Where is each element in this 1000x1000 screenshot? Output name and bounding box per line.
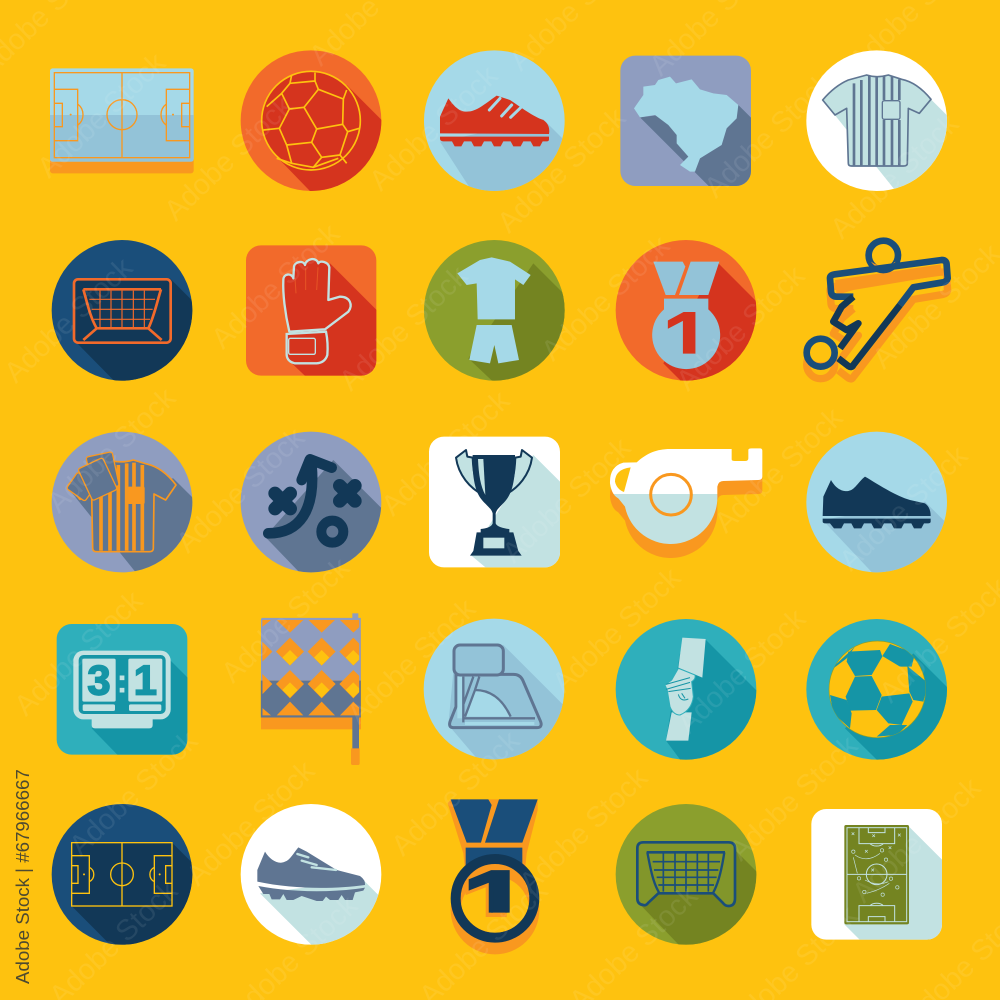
icon: navy medal with number 1 [448,799,539,954]
watermark pattern: Adobe Stock [833,440,974,577]
icon: goal on navy circle [52,240,192,381]
icon: football kit [424,240,565,381]
icon: red football boot [424,50,565,191]
icon: handball on orange circle [240,50,382,191]
watermark pattern: Adobe Stock [708,402,849,539]
icon: scoreboard 3:1: 1 [134,657,157,704]
watermark pattern: Adobe Stock [363,60,504,197]
watermark pattern: Adobe Stock [671,603,812,740]
icon: navy boot on blue circle [806,432,947,572]
icon: soccer ball on teal circle [806,619,947,760]
watermark pattern: Adobe Stock [215,552,356,689]
stock id caption: Adobe Stock | #67966667 [12,769,33,984]
icon: tactics board [240,432,382,572]
watermark pattern: Adobe Stock [158,90,299,227]
icon: map of Brazil [620,56,751,186]
watermark pattern: Adobe Stock [205,218,346,355]
watermark pattern: Adobe Stock [41,382,182,519]
watermark pattern: Adobe Stock [496,432,637,569]
icon: whistle [610,448,762,558]
icon: hand holding card [616,619,756,760]
icon: goal on olive circle [616,804,756,945]
icon: scoreboard 3:1: 3 [87,657,111,704]
watermark pattern: Adobe Stock [670,260,811,397]
watermark pattern: Adobe Stock [31,47,172,184]
icon: football pitch [50,68,194,173]
icon: navy medal with number 1: 1 [460,860,527,945]
watermark pattern: Adobe Stock [385,725,526,862]
icon: scoreboard 3:1: : [116,664,128,701]
watermark pattern: Adobe Stock [180,755,321,892]
watermark pattern: Adobe Stock [535,230,676,367]
icon: player kicking ball [807,241,948,379]
icon: goalkeeper glove [246,245,376,376]
watermark pattern: Adobe Stock [513,762,654,899]
watermark pattern: Adobe Stock [491,102,632,239]
watermark pattern: Adobe Stock [170,422,311,559]
watermark pattern: Adobe Stock [375,385,516,522]
watermark pattern: Adobe Stock [824,108,965,245]
icon: grey boot on white circle [240,804,382,945]
watermark pattern: Adobe Stock [333,260,474,397]
icon: linesman flag [260,613,361,765]
icon: substitutes bench seat [424,618,564,760]
icon: referee shirt with cards [52,432,192,572]
watermark pattern: Adobe Stock [8,585,149,722]
icon: medal with number 1 on orange circle: 1 [662,296,712,381]
icon: tactics pitch on white square [811,809,942,940]
icon: scoreboard 3:1 [56,624,188,755]
icon: pitch on navy circle [52,804,192,945]
icon: navy medal with number 1: 1 [463,856,530,940]
watermark pattern: Adobe Stock [723,730,864,867]
watermark pattern: Adobe Stock [846,772,987,909]
icon: trophy [428,436,560,568]
icon: medal with number 1 on orange circle [616,240,756,381]
watermark pattern: Adobe Stock [63,725,204,862]
watermark pattern: Adobe Stock [0,252,139,389]
watermark pattern: Adobe Stock [698,67,839,204]
icon: striped referee shirt [806,50,947,191]
watermark pattern: Adobe Stock [341,593,482,730]
watermark pattern: Adobe Stock [546,562,687,699]
